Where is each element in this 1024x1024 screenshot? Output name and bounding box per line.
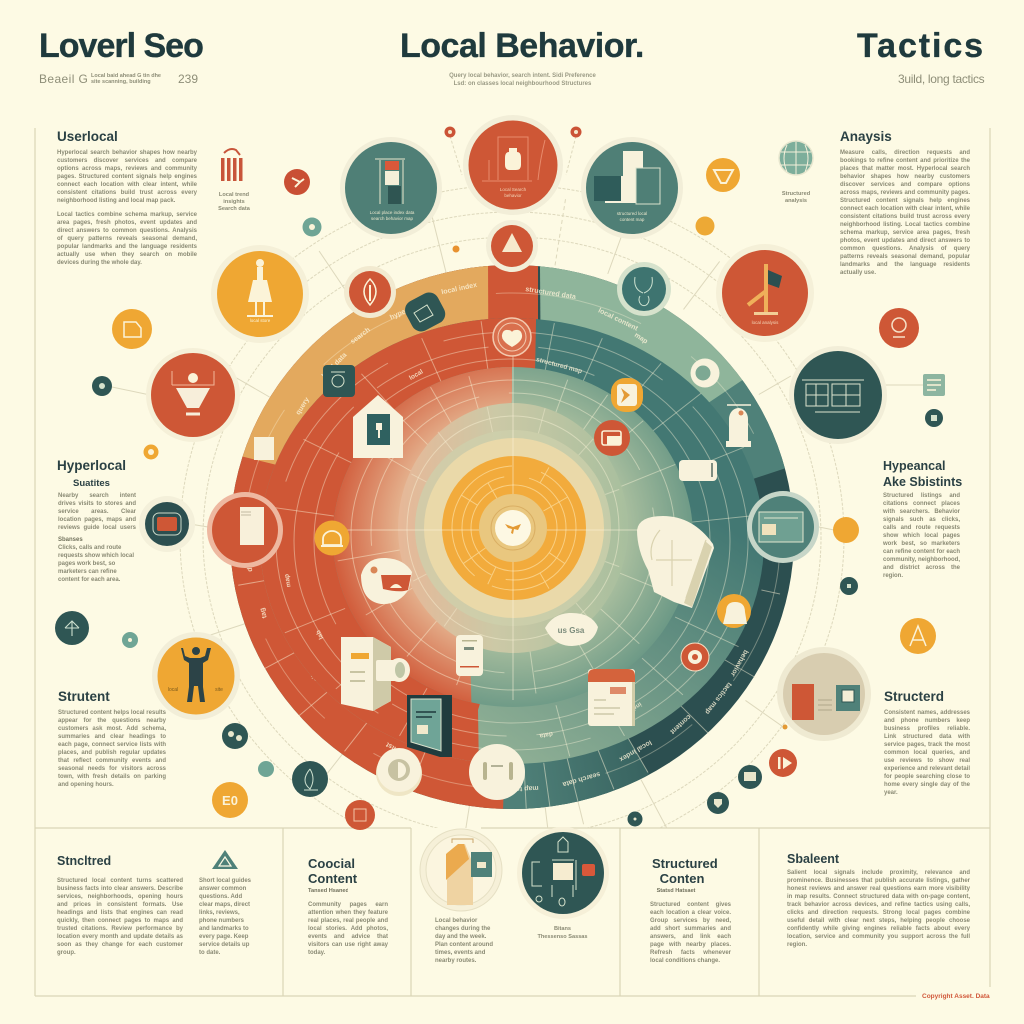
icon: red badge — [345, 800, 375, 830]
center sun — [442, 456, 586, 600]
icon: bubble with red label — [361, 558, 412, 604]
icon: speech blob: us Gsa — [558, 626, 585, 635]
circle: yellow figure — [211, 245, 309, 343]
icon: bell — [726, 405, 751, 447]
second ring labels: lab — [315, 629, 325, 640]
text: bottom panel one column two: Short local guides answer common questions. Add clear maps, direct links, reviews, phone numbers and landmarks to every page. Keep service details up to date. — [199, 878, 251, 956]
outer ring labels: content — [668, 713, 692, 735]
circle: cream orange figure — [420, 829, 502, 911]
heading: bottom panel four: Conten — [660, 871, 704, 886]
icon: file and mug — [341, 637, 410, 711]
caption: dark network: Bitans — [554, 926, 571, 932]
text: hyperlocal left small heading: Sbanses — [58, 537, 83, 543]
heading: analysis: Anaysis — [840, 129, 892, 144]
icon: triangle — [212, 850, 238, 869]
text: userlocal second paragraph: Local tactics combine schema markup, service area pages, fresh photos, event updates and direct answers to common questions. Analysis of query patterns reveals seasonal demand, popular landmarks and the language residents actually use when they search on mobile devices during the whole day. — [57, 212, 197, 266]
radial diagram — [230, 265, 794, 809]
text: bottom panel four subtitle: Statsd Hatsaet — [657, 888, 695, 894]
icon: yellow shield — [706, 158, 740, 192]
axis lines — [340, 356, 700, 700]
circle: teal building — [581, 137, 683, 239]
subtitle: center — [449, 72, 596, 87]
circle: dark device — [139, 496, 195, 552]
text: structent left: Structured content helps local results appear for the questions nearby customers ask most. Add schema, summaries and clear headings to each page, connect service lists with places, and publish regular updates that reflect community events and seasonal needs for visitors across town, with fresh details on parking and opening hours. — [58, 710, 166, 788]
icon: dark chain dot — [222, 723, 248, 749]
caption: globe: Structured — [782, 191, 810, 197]
icon: yellow coin — [212, 782, 248, 818]
icon: dark square — [323, 365, 355, 397]
caption: dark network: Thessenso Sassas — [537, 934, 588, 940]
heading: bottom panel one: Stncltred — [57, 854, 111, 868]
text: bottom panel two subtitle: Tansed Hsaned — [308, 888, 348, 894]
text: hyperlocal right: Structured listings and citations connect places with searchers. Behavior signals such as clicks, calls and route requests show which local pages work best, so marketers can refine content for each community, neighborhood, and district across the region. — [883, 493, 960, 579]
text: hyperlocal left second paragraph: Clicks, calls and route requests show which local pages work best, so marketers can refine content for each area. — [58, 545, 134, 583]
caption: bar icon — [218, 192, 250, 212]
subtitle: center: Lsd: on classes local neighbourhood Structures — [454, 81, 591, 87]
heading: hyperlocal left: Hyperlocal — [57, 458, 126, 473]
heading: bottom panel four: Structured — [652, 856, 718, 871]
outer ring labels: list — [385, 740, 397, 752]
icon: small card — [456, 635, 483, 676]
icon: cream circle bottom — [469, 744, 525, 800]
icon: yellow arrow badge — [611, 378, 643, 412]
icon: orange dot — [452, 246, 460, 252]
icon: yellow helmet — [314, 520, 350, 556]
title: center: Local Behavior. — [400, 27, 644, 65]
outer ring labels: tag — [259, 607, 269, 619]
text: bottom panel one: Structured local content turns scattered business facts into clear answers. Describe services, neighborhoods, opening hours and prices in consistent formats. Use headings and lists that engines can read quickly, then connect pages to maps and trusted citations. Review performance by location every month and update details as soon as they change for each customer group. — [57, 878, 183, 956]
subtitle: left: Beaeil G — [39, 72, 88, 86]
subtitle: left: 239 — [178, 72, 198, 86]
outer ring labels: tactics map — [703, 681, 733, 715]
icon: yellow coin: E0 — [222, 793, 238, 808]
subtitle: right: 3uild, long tactics — [898, 72, 984, 86]
second ring labels: tag — [343, 662, 355, 674]
icon: red person dot — [879, 308, 919, 348]
second ring — [260, 318, 764, 764]
guide arcs and connector spokes — [112, 136, 923, 889]
icon: yellow mitt — [717, 594, 751, 628]
heading: structured right: Structerd — [884, 689, 944, 704]
circle: red lamp: local analysis — [752, 320, 779, 325]
heading: hyperlocal right: Ake Sbistints — [883, 475, 962, 489]
circle: dark network — [517, 827, 609, 919]
fifth ring — [424, 438, 604, 618]
heading: hyperlocal right: Hypeancal — [883, 459, 946, 473]
text: structured right: Consistent names, addresses and phone numbers keep business profiles reliable. Link structured data with service pages, track the most common local queries, and use reviews to show real experience and relevant detail for people searching close to home every single day of the year. — [884, 710, 970, 796]
circle: dark shelves — [789, 346, 887, 444]
outer ring labels — [246, 282, 749, 792]
second ring labels: local tag — [408, 718, 435, 736]
icon: bar chart pictogram — [221, 149, 242, 181]
heading: userlocal: Userlocal — [57, 129, 118, 144]
icon: dark leaf circle — [292, 761, 328, 797]
icon: dark tiny dot — [628, 812, 642, 826]
caption: globe — [782, 191, 810, 204]
circle: red document — [207, 492, 283, 568]
text: bottom panel five: Salient local signals include proximity, relevance and prominence. Businesses that publish accurate listings, gather honest reviews and answer real questions earn more visibility in map results. Connect structured data with on-page content, track behavior across devices, and refine tactics using calls, clicks and direction requests. Strong local pages combine useful detail with clear next steps, helping people choose confidently while giving engines reliable facts about every location, service and community you support across the full region. — [787, 870, 970, 948]
outer ring: segments — [230, 265, 794, 809]
circle: teal building: structured local — [617, 211, 647, 216]
heading: bottom panel two: Coocial — [308, 856, 355, 871]
circle: beige panels — [777, 647, 871, 741]
outer ring labels: local content — [597, 307, 639, 333]
circle: red door — [463, 115, 563, 215]
icon: heart badge — [493, 318, 531, 356]
third ring — [333, 367, 693, 707]
outer ring labels: hyper map — [389, 300, 424, 322]
fourth ring — [398, 403, 628, 653]
icon: white ring — [690, 358, 720, 388]
icon: dark chat — [738, 765, 762, 789]
circle: red door: behavior — [504, 193, 522, 198]
caption: bar icon: Search data — [218, 206, 250, 212]
text: userlocal first paragraph: Hyperlocal search behavior shapes how nearby customers discover services and compare options across maps, reviews and community pages. Structured content signals help engines connect each location with clear intent, while consistent citations build trust across every neighborhood listing and local map pack. — [57, 150, 197, 204]
title: left: Loverl Seo — [39, 27, 203, 65]
footer credit: Copyright Asset. Data — [922, 993, 990, 1000]
text: analysis: Measure calls, direction requests and bookings to refine content and prioritize the places that matter most. Hyperlocal search behavior shapes how nearby customers discover services and compare options across maps, reviews and community pages. Structured content signals help engines connect each location with clear intent, while consistent citations build trust across every neighborhood listing. Local tactics combine schema markup, service area pages, fresh photos, event updates and direct answers to common questions. Analysis of query patterns reveals seasonal demand, popular landmarks and the language residents actually use. — [840, 150, 970, 276]
icon: yellow outline tag — [112, 309, 152, 349]
text: bottom panel three: Local behavior changes during the day and the week. Plan content around times, events and nearby routes. — [435, 918, 493, 964]
icon: dark card tag — [401, 289, 449, 335]
outer ring labels: search data — [562, 770, 601, 788]
heading: bottom panel two: Content — [308, 871, 357, 886]
circle: teal gate: Local place index data — [370, 210, 415, 215]
caption: globe: analysis — [785, 198, 807, 204]
subtitle: left: Local baid ahead G tin dhe — [91, 73, 161, 79]
heading: bottom panel five: Sbaleent — [787, 852, 839, 866]
circle: yellow figure: local — [168, 687, 178, 693]
icon: red play — [769, 749, 797, 777]
circle: red triangle — [486, 220, 538, 272]
outer ring labels: data — [246, 557, 254, 572]
circle: yellow figure — [152, 632, 240, 720]
frame and panel rules — [35, 128, 990, 996]
icon: cloth panel — [637, 516, 714, 608]
icon: yellow home dot — [144, 444, 158, 460]
subtitle: center: Query local behavior, search intent. Sidi Preference — [449, 73, 596, 79]
icon: red arrow dot — [284, 169, 310, 195]
circle: teal building: content map — [620, 217, 645, 222]
second ring labels: map — [283, 573, 293, 588]
circle: red leaf — [344, 266, 396, 318]
circle: teal window — [747, 491, 819, 563]
outer ring labels: search — [350, 327, 372, 346]
icon: marker top right — [570, 126, 582, 138]
icon: green tiny dot — [258, 761, 274, 777]
caption: dark network — [537, 926, 588, 940]
second ring labels: local — [408, 368, 425, 382]
second ring labels: data — [539, 730, 553, 739]
heading: hyperlocal left: Suatites — [73, 478, 110, 489]
outer ring labels: site — [308, 668, 321, 682]
second ring labels: index map — [612, 700, 643, 724]
text: bottom panel two: Community pages earn attention when they feature real places, real people and local stories. Add photos, events and advice that visitors can use right away today. — [308, 902, 388, 956]
circle: red lamp — [716, 244, 814, 342]
icon: cream circle bottom left — [376, 748, 422, 796]
icon: dark dot mid right — [840, 577, 858, 595]
outer ring labels: behavior — [729, 648, 749, 677]
icon: green dot — [302, 218, 322, 236]
outer ring labels: map tag — [512, 784, 539, 792]
outer ring labels: query — [295, 396, 311, 416]
heading: bottom panel four — [652, 856, 718, 886]
text: bottom panel four: Structured content gives each location a clear voice. Group services by need, add short summaries and answers, and link each page with nearby places. Refresh facts whenever local conditions change. — [650, 902, 731, 964]
title: right: Tactics — [857, 27, 985, 65]
icon: orange pin — [782, 724, 788, 730]
icon: yellow letter A — [900, 618, 936, 654]
heading: hyperlocal right — [883, 459, 962, 489]
icon: yellow small right — [833, 517, 859, 543]
circle: yellow figure: local store — [250, 318, 271, 323]
icon: red gauge — [681, 643, 709, 671]
caption: bar icon: Local trend insights — [219, 192, 249, 205]
subtitle: left: site scanning, building — [91, 79, 151, 85]
icon: house — [353, 395, 403, 458]
icon: dark arrow circle — [55, 611, 89, 645]
circle: red door: Local Search — [500, 187, 527, 192]
outer ring labels: local index — [441, 282, 478, 296]
icon: dark shield — [707, 792, 729, 814]
icon: cylinder — [679, 460, 717, 481]
icon: sage square — [923, 374, 945, 396]
outer ring labels: local data — [321, 352, 348, 380]
icon: tablet — [407, 695, 452, 757]
icon: yellow small dot — [696, 216, 714, 236]
circle: yellow figure: site — [215, 687, 223, 693]
second ring labels: structured map — [535, 356, 583, 375]
icon: calendar — [588, 669, 635, 726]
outer ring labels: map — [633, 332, 649, 346]
circle: teal stethoscope — [617, 262, 671, 316]
icon: globe — [779, 141, 813, 175]
icon: small note — [254, 437, 274, 460]
circle: teal gate — [340, 137, 442, 239]
icon: dark dot left — [92, 376, 112, 396]
icon: green small dot — [122, 632, 138, 648]
outer ring labels: structured data — [525, 286, 576, 301]
circle: red funnel — [146, 348, 240, 442]
icon: marker top left — [444, 126, 456, 138]
heading: structent left: Strutent — [58, 689, 110, 704]
icon: red window badge — [594, 420, 630, 456]
second ring labels — [283, 356, 643, 739]
icon: dark dot right — [925, 409, 943, 427]
circle: teal gate: search behavior map — [371, 216, 414, 221]
subtitle: left — [39, 72, 198, 86]
outer ring labels: local index — [618, 738, 653, 763]
icon: speech blob — [545, 613, 598, 646]
heading: hyperlocal left — [57, 458, 126, 489]
heading: bottom panel two — [308, 856, 357, 886]
